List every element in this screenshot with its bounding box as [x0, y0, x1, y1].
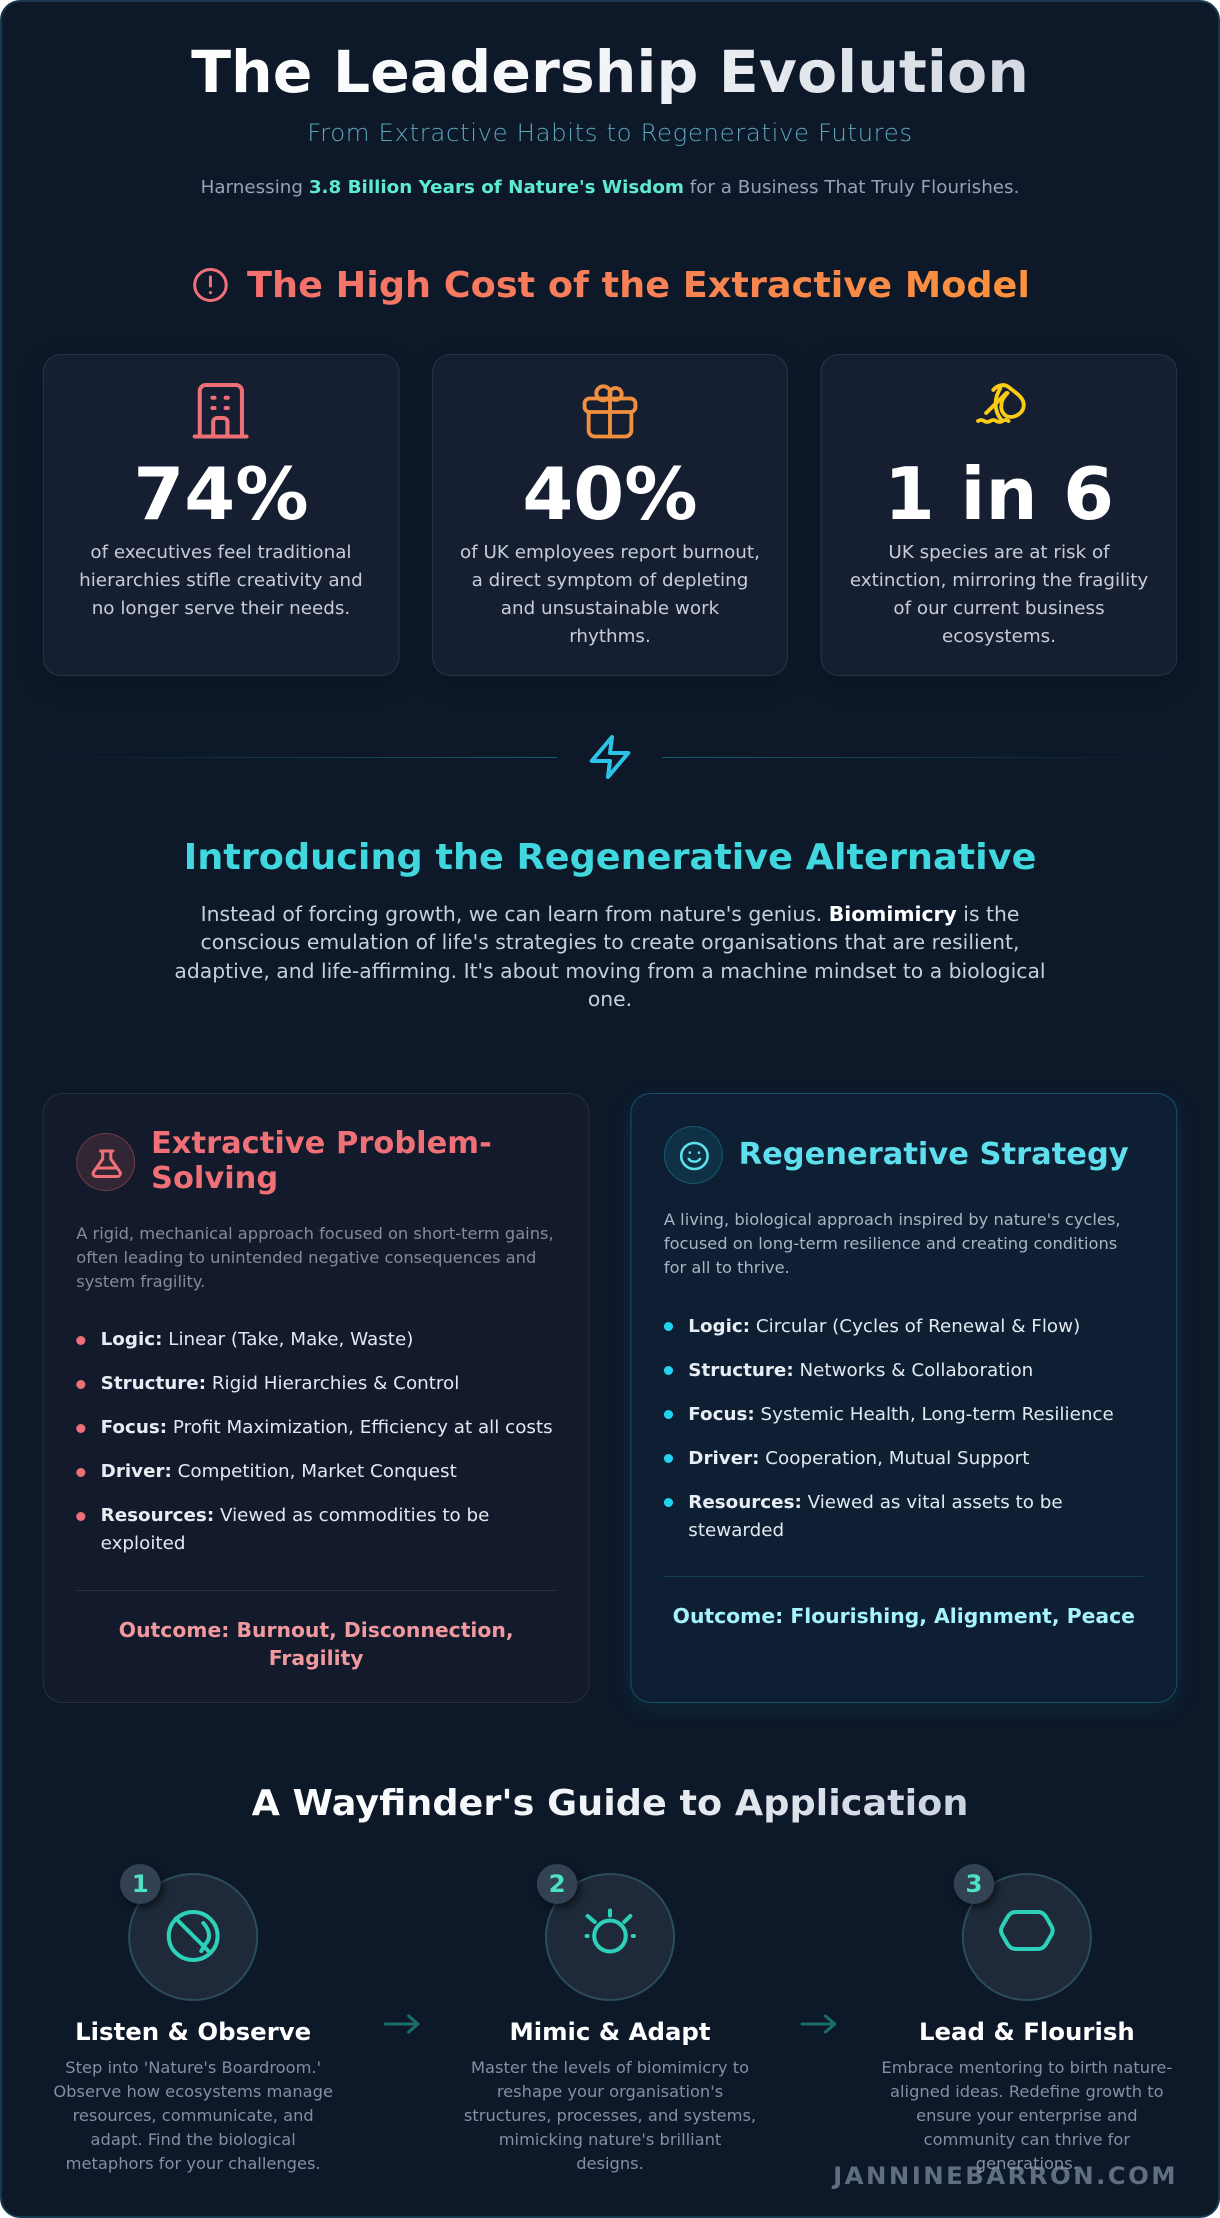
- list item: driver: [76, 1468, 85, 1476]
- list item: focus: [664, 1410, 673, 1418]
- stat description: [79, 542, 363, 619]
- list item: structure: [76, 1380, 85, 1388]
- step description: aligned ideas. Redefine growth to: [890, 2082, 1164, 2100]
- stat value: 40%: [522, 452, 698, 536]
- icon: gift: [582, 384, 638, 438]
- step description: designs.: [576, 2154, 644, 2172]
- panel: extractive problem-solving: Focus: Profit Maximization, Efficiency at all costs: [101, 1417, 553, 1438]
- icon: building: [192, 383, 249, 438]
- intro paragraph: Instead of forcing growth, we can learn from nature's genius. Biomimicry is the: [201, 902, 1019, 926]
- step description: mimicking nature's brilliant: [499, 2130, 721, 2148]
- stat description: no longer serve their needs.: [92, 598, 350, 619]
- intro paragraph: [174, 902, 1046, 1011]
- stat card: 1 in 6: [821, 354, 1177, 676]
- intro paragraph: conscious emulation of life's strategies to create organisations that are resilient,: [201, 930, 1019, 954]
- step title: Lead & Flourish: [919, 2018, 1135, 2046]
- tagline: Harnessing 3.8 Billion Years of Nature's Wisdom for a Business That Truly Flourishes.: [201, 177, 1019, 198]
- panel description: often leading to unintended negative consequences and: [76, 1248, 536, 1267]
- stat description: a direct symptom of depleting: [472, 570, 748, 591]
- step description: [53, 2058, 333, 2172]
- icon: ear off: [166, 1910, 220, 1962]
- stat card: 40%: [432, 354, 788, 676]
- step title: Listen & Observe: [75, 2018, 311, 2046]
- panel description: [76, 1224, 554, 1291]
- panel: regenerative strategy: Driver: Cooperation, Mutual Support: [688, 1448, 1029, 1469]
- stat description: ecosystems.: [942, 626, 1056, 647]
- panel: regenerative strategy: Logic: Circular (Cycles of Renewal & Flow): [688, 1316, 1080, 1337]
- heading: regenerative alternative: Introducing the Regenerative Alternative: [184, 836, 1036, 878]
- step description: [881, 2058, 1172, 2172]
- panel description: system fragility.: [76, 1272, 205, 1291]
- icon: hexagon: [999, 1910, 1055, 1951]
- arrow: [384, 2014, 420, 2034]
- outcome: Fragility: [269, 1646, 364, 1670]
- panel: extractive problem-solving: Logic: Linear (Take, Make, Waste): [101, 1329, 413, 1350]
- intro paragraph: one.: [588, 987, 632, 1011]
- panel heading: Extractive Problem-: [151, 1126, 492, 1161]
- panel heading: [151, 1126, 492, 1196]
- step number: 1: [132, 1870, 149, 1898]
- stat value: 74%: [133, 452, 309, 536]
- outcome: Outcome: Flourishing, Alignment, Peace: [673, 1604, 1135, 1628]
- stat description: hierarchies stifle creativity and: [79, 570, 363, 591]
- heading: high cost: The High Cost of the Extractive Model: [247, 264, 1030, 306]
- watermark: JANNINEBARRON.COM: [833, 2162, 1178, 2190]
- step number: 2: [549, 1870, 566, 1898]
- panel heading: Regenerative Strategy: [739, 1137, 1129, 1172]
- step 2: mimic & adapt: [464, 1864, 756, 2172]
- intro paragraph: adaptive, and life-affirming. It's about moving from a machine mindset to a biological: [174, 959, 1046, 983]
- panel: extractive problem-solving: exploited: [101, 1533, 185, 1554]
- panel: regenerative strategy: stewarded: [688, 1520, 784, 1541]
- panel: regenerative strategy: Resources: Viewed as vital assets to be: [688, 1492, 1063, 1513]
- panel: regenerative strategy: Focus: Systemic Health, Long-term Resilience: [688, 1404, 1114, 1425]
- step 3: lead & flourish: [881, 1864, 1172, 2172]
- list item: driver: [664, 1454, 673, 1462]
- step description: reshape your organisation's: [497, 2082, 723, 2100]
- step description: ensure your enterprise and: [916, 2106, 1138, 2124]
- list item: structure: [664, 1366, 673, 1374]
- list item: logic: [76, 1336, 85, 1344]
- list item: logic: [664, 1322, 673, 1330]
- step description: [464, 2058, 756, 2172]
- step description: Master the levels of biomimicry to: [471, 2058, 749, 2076]
- heading: wayfinder's guide: A Wayfinder's Guide to Application: [252, 1783, 968, 1824]
- panel: extractive problem-solving: Driver: Competition, Market Conquest: [101, 1461, 457, 1482]
- stat description: [850, 542, 1148, 647]
- panel heading: Solving: [151, 1161, 278, 1196]
- arrow: [800, 2014, 836, 2034]
- step number: [537, 1864, 577, 1904]
- outcome: [119, 1618, 514, 1670]
- list item: resources: [76, 1512, 85, 1520]
- step description: Step into 'Nature's Boardroom.': [65, 2058, 321, 2076]
- stat description: UK species are at risk of: [888, 542, 1110, 563]
- panel: extractive problem-solving: Structure: Rigid Hierarchies & Control: [101, 1373, 459, 1394]
- list item: resources: [664, 1498, 673, 1506]
- step description: Observe how ecosystems manage: [53, 2082, 333, 2100]
- stat description: of our current business: [893, 598, 1105, 619]
- subtitle: From Extractive Habits to Regenerative Futures: [307, 119, 913, 147]
- stat value: 1 in 6: [884, 452, 1114, 536]
- step description: resources, communicate, and: [73, 2106, 314, 2124]
- step description: Embrace mentoring to birth nature-: [881, 2058, 1172, 2076]
- icon: lightning bolt: [590, 735, 630, 779]
- step title: Mimic & Adapt: [509, 2018, 711, 2046]
- icon: smile: [664, 1126, 723, 1184]
- step 1: listen & observe: [53, 1864, 333, 2172]
- panel description: for all to thrive.: [664, 1258, 790, 1276]
- stat description: and unsustainable work: [501, 598, 719, 619]
- step description: community can thrive for: [924, 2130, 1130, 2148]
- step description: metaphors for your challenges.: [66, 2154, 321, 2172]
- stat description: extinction, mirroring the fragility: [850, 570, 1148, 591]
- title: The Leadership Evolution: [191, 39, 1029, 106]
- divider with lightning icon: [98, 735, 1122, 779]
- step description: generations.: [976, 2154, 1078, 2172]
- stat description: of executives feel traditional: [90, 542, 351, 563]
- outcome: Outcome: Burnout, Disconnection,: [119, 1618, 514, 1642]
- panel description: A living, biological approach inspired by nature's cycles,: [664, 1210, 1121, 1228]
- stat description: [460, 542, 760, 647]
- panel description: [664, 1210, 1121, 1276]
- step number: 3: [965, 1870, 982, 1898]
- step number: [954, 1864, 994, 1904]
- panel: extractive problem-solving: [43, 1093, 590, 1703]
- step description: structures, processes, and systems,: [464, 2106, 756, 2124]
- icon: tree on ground: [976, 383, 1026, 424]
- panel: regenerative strategy: Structure: Networks & Collaboration: [688, 1360, 1033, 1381]
- icon: alert circle: [193, 268, 228, 302]
- step description: adapt. Find the biological: [91, 2130, 296, 2148]
- stat description: of UK employees report burnout,: [460, 542, 760, 563]
- icon: sun: [584, 1908, 636, 1954]
- panel description: A rigid, mechanical approach focused on short-term gains,: [76, 1224, 554, 1243]
- stat card: 74%: [43, 354, 399, 676]
- panel description: focused on long-term resilience and creating conditions: [664, 1234, 1117, 1252]
- icon: flask: [76, 1133, 135, 1191]
- step number: [120, 1864, 161, 1904]
- panel: extractive problem-solving: Resources: Viewed as commodities to be: [101, 1505, 489, 1526]
- list item: focus: [76, 1424, 85, 1432]
- stat description: rhythms.: [569, 626, 651, 647]
- panel: regenerative strategy: [630, 1093, 1177, 1703]
